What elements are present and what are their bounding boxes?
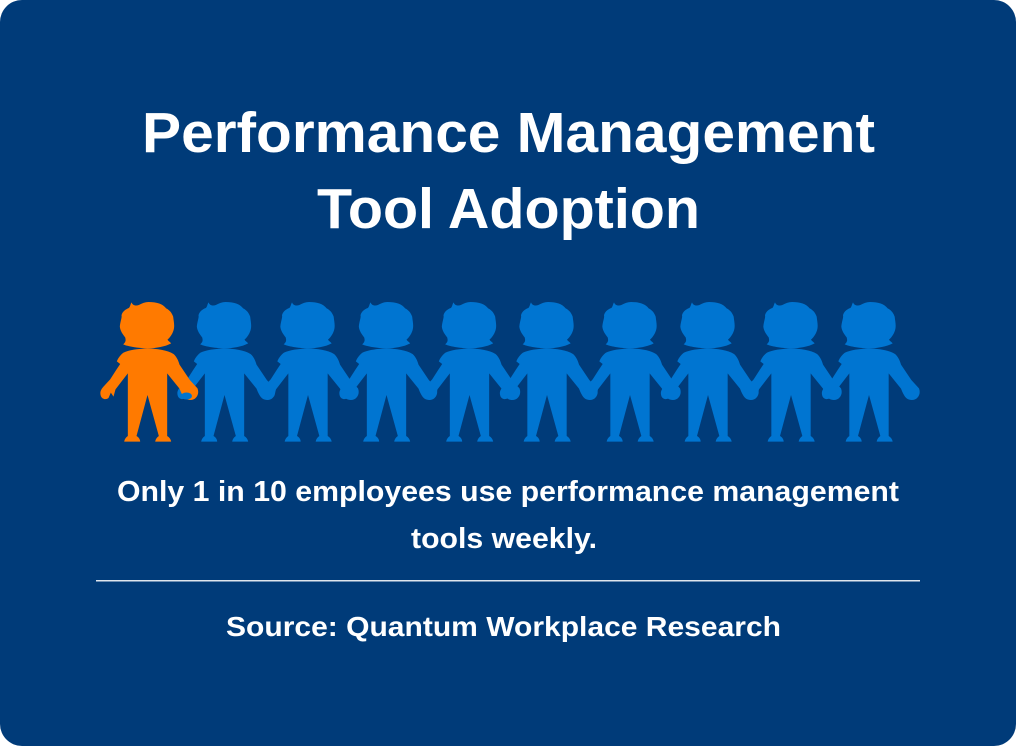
title: Tool Adoption xyxy=(317,177,700,241)
title xyxy=(142,101,875,241)
caption: tools weekly. xyxy=(411,523,597,555)
icon: blue person xyxy=(661,302,759,442)
caption: Only 1 in 10 employees use performance management xyxy=(117,476,899,508)
pictogram: row of ten people holding hands xyxy=(100,302,920,442)
icon: blue person xyxy=(177,302,275,442)
title: Performance Management xyxy=(142,101,875,165)
icon: blue person xyxy=(822,302,920,442)
icon: blue person xyxy=(261,302,359,442)
icon: blue person xyxy=(744,302,842,442)
source line: Source: Quantum Workplace Research xyxy=(226,611,781,642)
icon: blue person xyxy=(583,302,681,442)
icon: blue hand over orange hand xyxy=(181,392,192,400)
icon: blue person xyxy=(500,302,598,442)
icon: blue person xyxy=(422,302,520,442)
caption xyxy=(117,476,899,555)
icon: blue person xyxy=(339,302,437,442)
icon: orange person xyxy=(100,302,198,442)
